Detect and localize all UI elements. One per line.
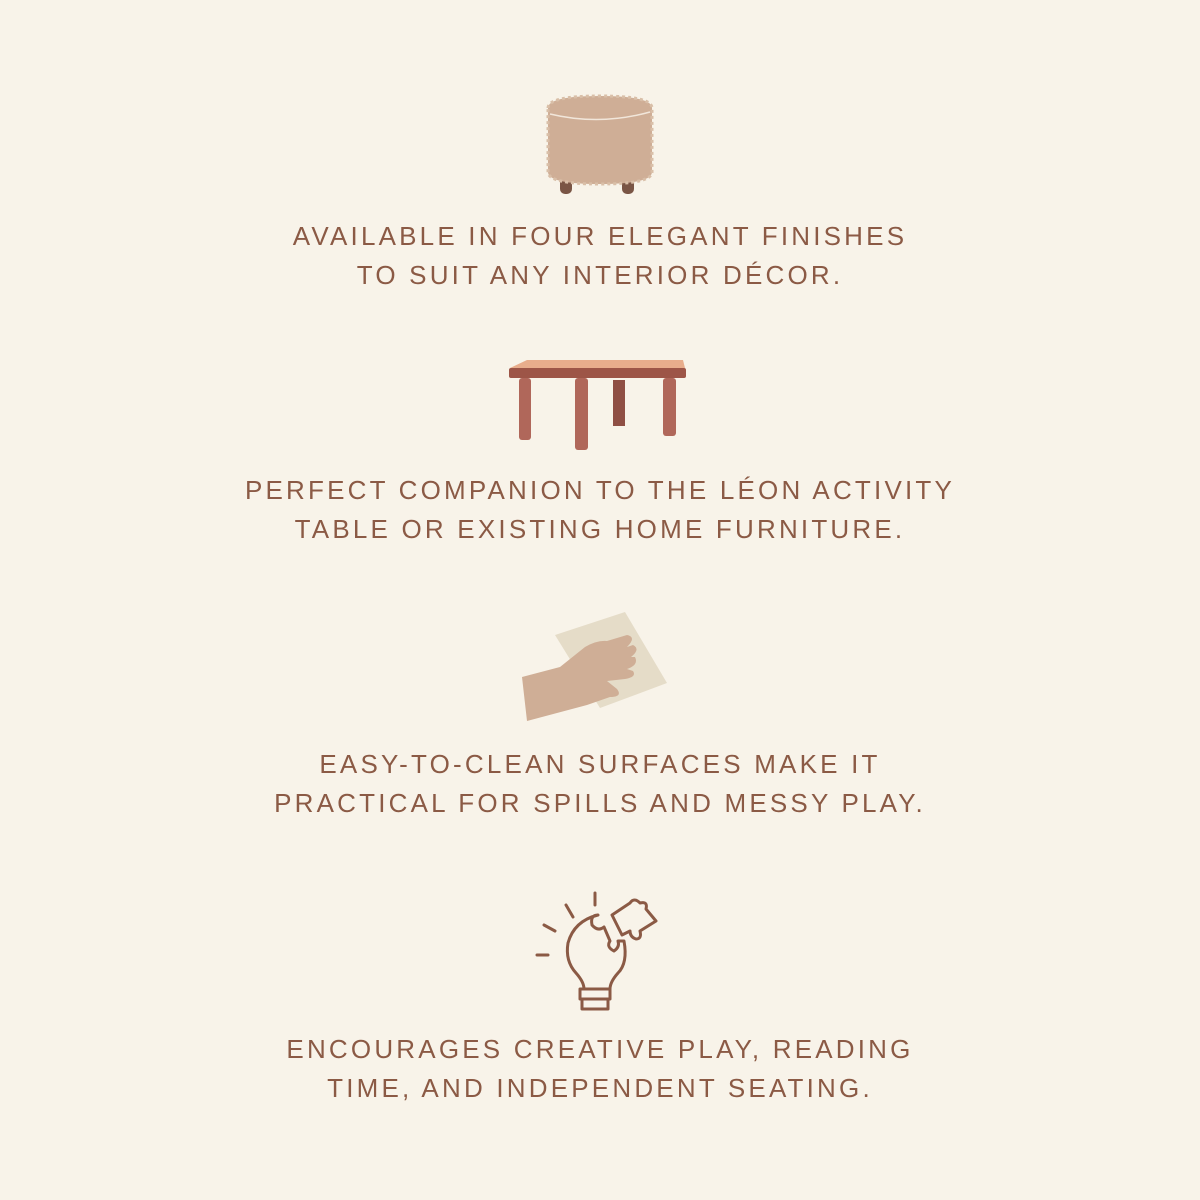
text: easy clean	[274, 749, 926, 818]
text: encourages: TIME, AND INDEPENDENT SEATING.	[327, 1073, 873, 1103]
icon: table	[509, 360, 686, 450]
text: easy clean: PRACTICAL FOR SPILLS AND MESSY PLAY.	[274, 788, 926, 818]
text: companion	[245, 475, 955, 544]
text: companion: PERFECT COMPANION TO THE LÉON ACTIVITY	[245, 475, 955, 505]
text: finishes: TO SUIT ANY INTERIOR DÉCOR.	[357, 260, 843, 290]
text: finishes	[292, 221, 907, 290]
icon: lightbulb puzzle	[536, 892, 658, 1010]
text: easy clean: EASY-TO-CLEAN SURFACES MAKE IT	[319, 749, 881, 779]
text: encourages: ENCOURAGES CREATIVE PLAY, READING	[286, 1034, 914, 1064]
text: companion: TABLE OR EXISTING HOME FURNITURE.	[295, 514, 905, 544]
text: encourages	[286, 1034, 914, 1103]
icon: hand wiping	[522, 612, 667, 721]
icon: ottoman	[546, 94, 654, 194]
text: finishes: AVAILABLE IN FOUR ELEGANT FINISHES	[293, 221, 907, 251]
